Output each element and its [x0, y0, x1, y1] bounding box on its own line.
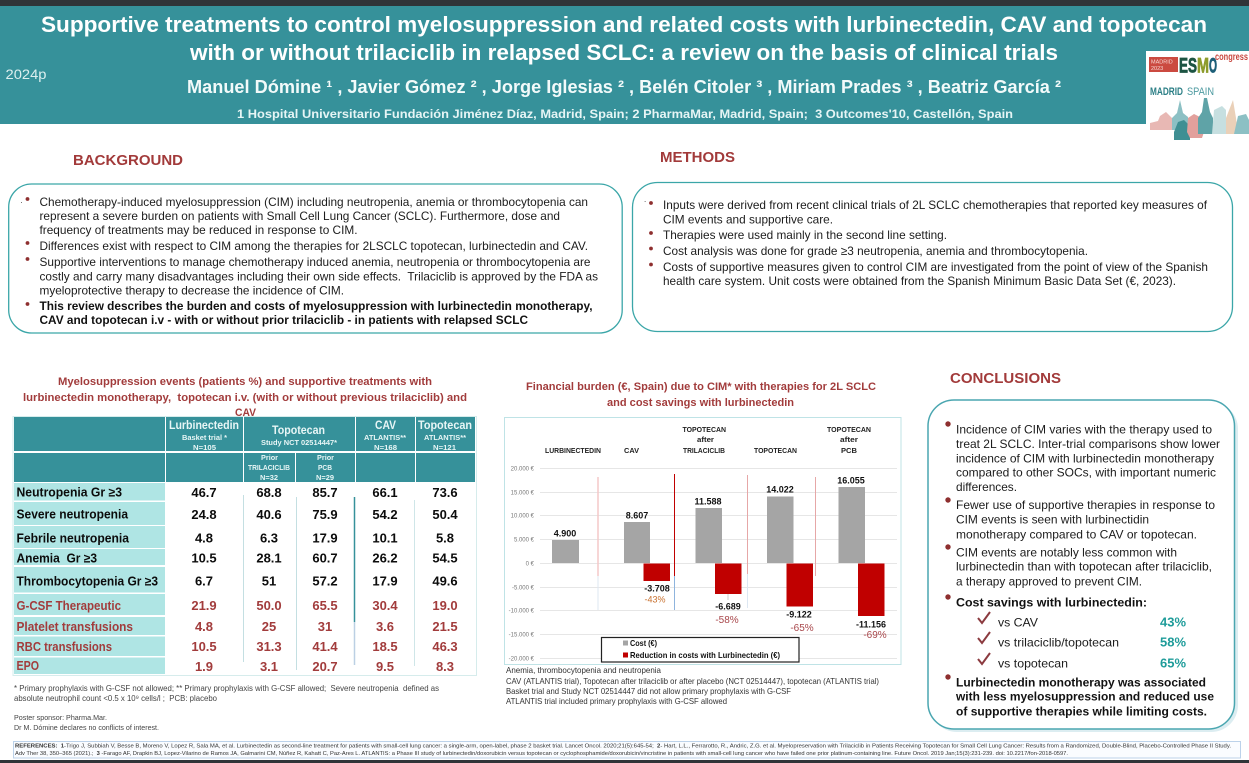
- title: Supportive treatments to control myelosuppression and related costs with lurbinectedin, CAV and topotecan: [41, 12, 1207, 37]
- chart notes: [506, 665, 879, 706]
- table header: PCB: [318, 465, 332, 472]
- table header: N=168: [374, 443, 397, 452]
- bullet list: background: Supportive interventions to manage chemotherapy induced anemia, neutropenia or thrombocytopenia are: [40, 255, 591, 269]
- bullet list: background: frequency of treatments may be reduced in response to CIM.: [40, 223, 358, 237]
- row: G-CSF Therapeutic: G-CSF Therapeutic: [16, 599, 121, 613]
- reduction value labels: -3.708: [644, 584, 670, 594]
- reduction value labels: [644, 584, 886, 630]
- therapy column headings: after: [697, 437, 714, 444]
- row: Febrile neutropenia: Febrile neutropenia: [16, 532, 130, 546]
- row: Platelet transfusions: [16, 619, 458, 634]
- bullet list: methods: Inputs were derived from recent clinical trials of 2L SCLC chemotherapies that reported key measures of: [663, 198, 1208, 212]
- table header: N=32: [260, 475, 278, 482]
- cost value labels: 8.607: [626, 510, 648, 520]
- heading: financial burden chart: [526, 381, 876, 409]
- row: RBC transfusions: [16, 639, 458, 654]
- table header: N=105: [193, 443, 216, 452]
- row: Febrile neutropenia: 4.8: [195, 530, 213, 546]
- savings: vs CAV: [978, 612, 1186, 630]
- cost value labels: 16.055: [837, 476, 865, 486]
- logo: ESMO congress Madrid: MADRID: [1151, 60, 1173, 66]
- table header: ATLANTIS**: [364, 433, 406, 442]
- row: Febrile neutropenia: [16, 530, 454, 546]
- panel: background: [9, 184, 622, 333]
- reduction value labels: -6.689: [715, 602, 741, 612]
- bullet list: methods: Therapies were used mainly in the second line setting.: [663, 228, 947, 242]
- savings: vs CAV: 43%: [1160, 616, 1186, 630]
- bullet list: background: Chemotherapy-induced myelosuppression (CIM) including neutropenia, anemia or thrombocytopenia can: [40, 195, 588, 209]
- row: G-CSF Therapeutic: 50.0: [256, 598, 282, 613]
- row: Thrombocytopenia Gr >=3: 17.9: [372, 574, 398, 588]
- table header: Prior: [261, 455, 278, 462]
- gridlines: [540, 468, 897, 658]
- heading: background: BACKGROUND: [73, 153, 183, 169]
- y axis labels: 0 €: [526, 562, 535, 568]
- logo: ESMO congress Madrid: M: [1197, 54, 1209, 78]
- conclusion bullets: Incidence of CIM varies with the therapy used to: [956, 422, 1212, 436]
- bullet list: background: [26, 195, 598, 327]
- y axis labels: 20.000 €: [511, 466, 535, 472]
- panel: methods: .: [644, 195, 646, 204]
- reduction bars: [644, 564, 884, 616]
- heading: conclusions: CONCLUSIONS: [950, 371, 1061, 387]
- therapy column headings: TOPOTECAN: [827, 427, 871, 434]
- conclusion bullets: monotherapy compared to CAV or topotecan.: [956, 528, 1197, 542]
- row: RBC transfusions: 46.3: [432, 639, 458, 654]
- heading: myelosuppression table: Myelosuppression events (patients %) and supportive treatments with: [58, 376, 432, 388]
- chart notes: ATLANTIS trial included primary prophylaxis with G-CSF allowed: [506, 696, 727, 706]
- row: EPO: 8.3: [436, 659, 454, 674]
- row: Neutropenia Gr >=3: 73.6: [432, 485, 458, 500]
- table footnotes: absolute neutrophil count <0.5 x 10⁹ cells/l ; PCB: placebo: [14, 694, 218, 703]
- row: G-CSF Therapeutic: 21.9: [191, 598, 217, 613]
- table header: Study NCT 02514447*: [261, 438, 337, 447]
- conclusion bullets: Cost savings with lurbinectedin:: [956, 596, 1147, 610]
- legend: [602, 638, 799, 662]
- reduction value labels: -11.156: [856, 620, 886, 630]
- table header: Topotecan: [418, 418, 472, 432]
- logo: ESMO congress Madrid: SPAIN: [1187, 86, 1214, 98]
- bullet list: background: represent a severe burden on patients with Small Cell Lung Cancer (SCLC). Furthermore, dose and: [40, 209, 560, 223]
- savings: vs topotecan: 65%: [1160, 656, 1186, 670]
- bar chart: financial burden: [504, 418, 901, 664]
- row: Anemia Gr >=3: Anemia Gr ≥3: [16, 552, 97, 566]
- table header: N=29: [316, 475, 334, 482]
- table header: [14, 417, 475, 482]
- row: RBC transfusions: 41.4: [312, 639, 338, 654]
- table header: Topotecan: [272, 425, 325, 437]
- row: Neutropenia Gr >=3: Neutropenia Gr ≥3: [16, 486, 122, 500]
- table header: Prior: [317, 455, 334, 462]
- row: G-CSF Therapeutic: 19.0: [432, 598, 458, 613]
- title: with or without trilaciclib in relapsed SCLC: a review on the basis of clinical trials: [189, 40, 1058, 65]
- therapy column headings: TOPOTECAN: [682, 427, 726, 434]
- y axis labels: [509, 466, 535, 662]
- savings: vs topotecan: vs topotecan: [998, 656, 1068, 670]
- key conclusion: Lurbinectedin monotherapy was associated: [956, 676, 1206, 690]
- y axis labels: -20.000 €: [509, 656, 535, 662]
- y axis labels: -5.000 €: [512, 586, 535, 592]
- therapy column headings: CAV: [624, 448, 639, 455]
- row: Anemia Gr >=3: 28.1: [256, 550, 282, 566]
- legend: Cost (€): [630, 638, 657, 648]
- y axis labels: 5.000 €: [514, 538, 535, 544]
- row: Thrombocytopenia Gr >=3: 49.6: [432, 574, 458, 588]
- bullet list: methods: CIM events and supportive care.: [663, 212, 833, 226]
- row: Platelet transfusions: Platelet transfusions: [16, 620, 133, 634]
- key conclusion: of supportive therapies while limiting costs.: [956, 704, 1207, 718]
- row: Severe neutropenia: 50.4: [432, 507, 458, 522]
- row: G-CSF Therapeutic: 30.4: [372, 598, 398, 613]
- row: Febrile neutropenia: 10.1: [372, 530, 398, 546]
- affiliations: 1 Hospital Universitario Fundación Jiménez Díaz, Madrid, Spain; 2 PharmaMar, Madrid, Spain; 3 Outcomes'10, Castellón, Spain: [237, 107, 1013, 121]
- row: EPO: 9.5: [376, 659, 394, 674]
- table header: CAV: [375, 418, 396, 432]
- row: Anemia Gr >=3: 10.5: [191, 550, 217, 566]
- logo: ESMO congress Madrid: ES: [1179, 54, 1197, 78]
- authors: Manuel Dómine ¹ , Javier Gómez ² , Jorge Iglesias ² , Belén Citoler ³ , Miriam Prades ³ , Beatriz García ²: [187, 77, 1061, 97]
- title: [41, 12, 1207, 65]
- panel: methods: [632, 182, 1232, 332]
- therapy column headings: after: [840, 437, 858, 444]
- percentage labels: -69%: [863, 630, 887, 641]
- references: [14, 742, 1240, 758]
- row: Severe neutropenia: [16, 507, 458, 522]
- chart notes: Anemia, thrombocytopenia and neutropenia: [506, 665, 661, 675]
- row: Thrombocytopenia Gr >=3: Thrombocytopenia Gr ≥3: [16, 574, 158, 588]
- logo: ESMO congress Madrid: O: [1209, 54, 1217, 78]
- conclusion bullets: incidence of CIM with lurbinectedin monotherapy: [956, 452, 1214, 466]
- therapy column headings: [545, 427, 871, 455]
- row: Febrile neutropenia: 6.3: [260, 530, 278, 546]
- key conclusion: with less myelosuppression and reduced use: [955, 690, 1214, 704]
- row: Thrombocytopenia Gr >=3: 51: [262, 574, 276, 588]
- row: Platelet transfusions: 21.5: [432, 619, 458, 634]
- bullet list: background: myeloprotective therapy to decrease the incidence of CIM.: [40, 284, 344, 298]
- heading: myelosuppression table: lurbinectedin monotherapy, topotecan i.v. (with or without previous trilaciclib) and: [23, 392, 467, 404]
- savings: vs trilaciclib/topotecan: 58%: [1160, 636, 1186, 650]
- key conclusion: [955, 676, 1214, 718]
- row: RBC transfusions: RBC transfusions: [16, 640, 112, 654]
- table: myelosuppression events: [13, 416, 476, 676]
- bullet list: methods: Costs of supportive measures given to control CIM are investigated from the point of view of the Spanish: [663, 260, 1208, 274]
- conclusion bullets: Fewer use of supportive therapies in response to: [956, 498, 1215, 512]
- row: Neutropenia Gr >=3: [16, 485, 458, 500]
- row: Neutropenia Gr >=3: 68.8: [256, 485, 282, 500]
- heading: myelosuppression table: CAV: [235, 407, 257, 419]
- conclusion bullets: treat 2L SCLC. Inter-trial comparisons show lower: [956, 437, 1220, 451]
- references: REFERENCES: 1-Trigo J, Subbiah V, Besse B, Moreno V, Lopez R, Sala MA, et al. Lurbinectedin as second-line treatment for patients with small-cell lung cancer: a single-arm, open-label, phase 2 basket trial. Lancet Oncol. 2020;21(5):645-54; 2- Hart, L.L., Ferrarotto, R., Andric, Z.G. et al. Myelopreservation with Trilaciclib in Patients Receiving Topotecan for Small Cell Lung Cancer: Results from a Randomized, Double-Blind, Placebo-Controlled Phase II Study.: [15, 744, 1231, 750]
- row: Neutropenia Gr >=3: 46.7: [191, 485, 217, 500]
- bullet list: background: This review describes the burden and costs of myelosuppression with lurbinectedin monotherapy,: [40, 299, 592, 313]
- heading: methods: METHODS: [660, 150, 735, 166]
- cost bars: [552, 487, 865, 563]
- y axis labels: 10.000 €: [511, 514, 535, 520]
- row: Anemia Gr >=3: 54.5: [432, 550, 458, 566]
- sponsor and disclosure: Dr M. Dómine declares no conflicts of interest.: [14, 725, 159, 732]
- percentage labels: [644, 594, 887, 641]
- logo: ESMO congress Madrid: 2023: [1151, 66, 1163, 72]
- column dividers: [244, 495, 414, 670]
- conclusion bullets: CIM events are notably less common with: [956, 546, 1177, 560]
- row: Anemia Gr >=3: 60.7: [312, 550, 338, 566]
- row: Platelet transfusions: 31: [318, 619, 332, 634]
- conclusion bullets: differences.: [956, 480, 1017, 494]
- table header: ATLANTIS**: [424, 433, 466, 442]
- savings: vs trilaciclib/topotecan: vs trilaciclib/topotecan: [998, 636, 1119, 650]
- row: Thrombocytopenia Gr >=3: 57.2: [312, 574, 338, 588]
- bullet list: methods: Cost analysis was done for grade ≥3 neutropenia, anemia and thrombocytopenia.: [663, 244, 1088, 258]
- bullet list: background: costly and carry many disadvantages including their own side effects. Trilaciclib is approved by the FDA as: [40, 270, 598, 284]
- chart notes: CAV (ATLANTIS trial), Topotecan after trilaciclib or after placebo (NCT 02514447), topotecan (ATLANTIS trial): [506, 676, 879, 686]
- bullet list: methods: [649, 198, 1208, 288]
- chart notes: Basket trial and Study NCT 02514447 did not allow primary prophylaxis with G-CSF: [506, 686, 791, 696]
- heading: financial burden chart: Financial burden (€, Spain) due to CIM* with therapies for 2L SCLC: [526, 381, 876, 393]
- row: EPO: EPO: [16, 659, 39, 673]
- table header: TRILACICLIB: [248, 465, 290, 472]
- references: Adv Ther 38, 350–365 (2021).; 3 -Farago AF, Drapkin BJ, Lopez-Vilarino de Ramos JA, Galmarini CM, Núñez R, Kahatt C, Paz-Ares L. ATLANTIS: a Phase III study of lurbinectedin/doxorubicin versus topotecan or cyclophosphamide/doxorubicin/vincristine in patients with small-cell lung cancer who have failed one prior platinum-containing line. Future Oncol. 2019 Jan;15(3):231-239. doi: 10.2217/fon-2018-0597.: [15, 751, 1068, 757]
- table header: N=121: [433, 443, 456, 452]
- sponsor and disclosure: [14, 715, 159, 732]
- therapy column headings: LURBINECTEDIN: [545, 448, 601, 455]
- row: Platelet transfusions: 25: [262, 619, 276, 634]
- conclusion bullets: CIM events is seen with lurbinectidin: [956, 512, 1149, 526]
- row: Anemia Gr >=3: [16, 550, 458, 566]
- row: RBC transfusions: 18.5: [372, 639, 398, 654]
- percentage labels: -65%: [790, 623, 814, 634]
- therapy column headings: TRILACICLIB: [683, 448, 725, 455]
- logo: ESMO congress Madrid: MADRID: [1150, 86, 1183, 98]
- conclusion bullets: lurbinectedin than with topotecan after trilaciclib,: [956, 560, 1212, 574]
- percentage labels: -43%: [644, 594, 666, 604]
- row: Febrile neutropenia: 17.9: [312, 530, 338, 546]
- cost value labels: 14.022: [766, 484, 794, 494]
- savings: vs topotecan: [978, 653, 1186, 670]
- row: Febrile neutropenia: 5.8: [436, 530, 454, 546]
- reduction value labels: -9.122: [786, 610, 812, 620]
- table footnotes: [14, 684, 439, 703]
- savings: vs CAV: vs CAV: [998, 616, 1038, 630]
- percentage labels: -58%: [715, 615, 739, 626]
- bullet list: methods: health care system. Unit costs were obtained from the Spanish Minimum Basic Data Set (€, 2023).: [663, 274, 1176, 288]
- table header: Lurbinectedin: [169, 418, 239, 432]
- savings: vs trilaciclib/topotecan: [978, 632, 1186, 650]
- row: Neutropenia Gr >=3: 85.7: [312, 485, 338, 500]
- row: EPO: 1.9: [195, 659, 213, 674]
- heading: financial burden chart: and cost savings with lurbinectedin: [607, 397, 794, 409]
- table header: Basket trial *: [182, 433, 227, 442]
- row: G-CSF Therapeutic: 65.5: [312, 598, 338, 613]
- therapy column headings: PCB: [841, 448, 857, 455]
- row: Platelet transfusions: 4.8: [195, 619, 213, 634]
- row: Platelet transfusions: 3.6: [376, 619, 394, 634]
- header banner: [0, 6, 1249, 124]
- row: Thrombocytopenia Gr >=3: 6.7: [195, 574, 213, 588]
- row: EPO: 3.1: [260, 659, 278, 674]
- row: Severe neutropenia: 54.2: [372, 507, 398, 522]
- row: Severe neutropenia: 40.6: [256, 507, 282, 522]
- logo: ESMO congress Madrid: [1146, 51, 1249, 141]
- cost value labels: 11.588: [694, 496, 722, 506]
- panel: conclusions: [928, 400, 1238, 732]
- bullet list: background: Differences exist with respect to CIM among the therapies for 2LSCLC topotecan, lurbinectedin and CAV.: [40, 239, 588, 253]
- y axis labels: -10.000 €: [509, 608, 535, 614]
- y axis labels: -15.000 €: [509, 632, 535, 638]
- row: RBC transfusions: 10.5: [191, 639, 217, 654]
- row: Neutropenia Gr >=3: 66.1: [372, 485, 398, 500]
- cost value labels: 4.900: [554, 528, 576, 538]
- panel: background: .: [20, 196, 23, 205]
- row: Thrombocytopenia Gr >=3: [16, 574, 458, 588]
- row: Severe neutropenia: 24.8: [191, 507, 217, 522]
- row: EPO: [16, 659, 454, 674]
- conclusion bullets: compared to other SOCs, with important numeric: [956, 466, 1216, 480]
- row: RBC transfusions: 31.3: [256, 639, 282, 654]
- y axis labels: 15.000 €: [511, 490, 535, 496]
- row: G-CSF Therapeutic: [16, 598, 458, 613]
- row: EPO: 20.7: [312, 659, 338, 674]
- cost value labels: [554, 476, 865, 538]
- poster code: 2024p: [6, 67, 46, 82]
- row label backgrounds: [14, 483, 165, 674]
- conclusion bullets: a therapy approved to prevent CIM.: [956, 574, 1142, 588]
- conclusion bullets: [945, 421, 1220, 680]
- legend: Reduction in costs with Lurbinectedin (€): [630, 650, 780, 660]
- table footnotes: * Primary prophylaxis with G-CSF not allowed; ** Primary prophylaxis with G-CSF allowed; Severe neutropenia defined as: [14, 684, 439, 693]
- bullet list: background: CAV and topotecan i.v - with or without prior trilaciclib - in patients with relapsed SCLC: [40, 313, 528, 327]
- therapy column headings: TOPOTECAN: [754, 448, 797, 455]
- row: Anemia Gr >=3: 26.2: [372, 550, 398, 566]
- row: Severe neutropenia: 75.9: [312, 507, 338, 522]
- sponsor and disclosure: Poster sponsor: Pharma.Mar.: [14, 715, 107, 722]
- heading: myelosuppression table: [23, 376, 467, 419]
- row: Severe neutropenia: Severe neutropenia: [16, 508, 129, 522]
- vertical separators: [598, 474, 816, 610]
